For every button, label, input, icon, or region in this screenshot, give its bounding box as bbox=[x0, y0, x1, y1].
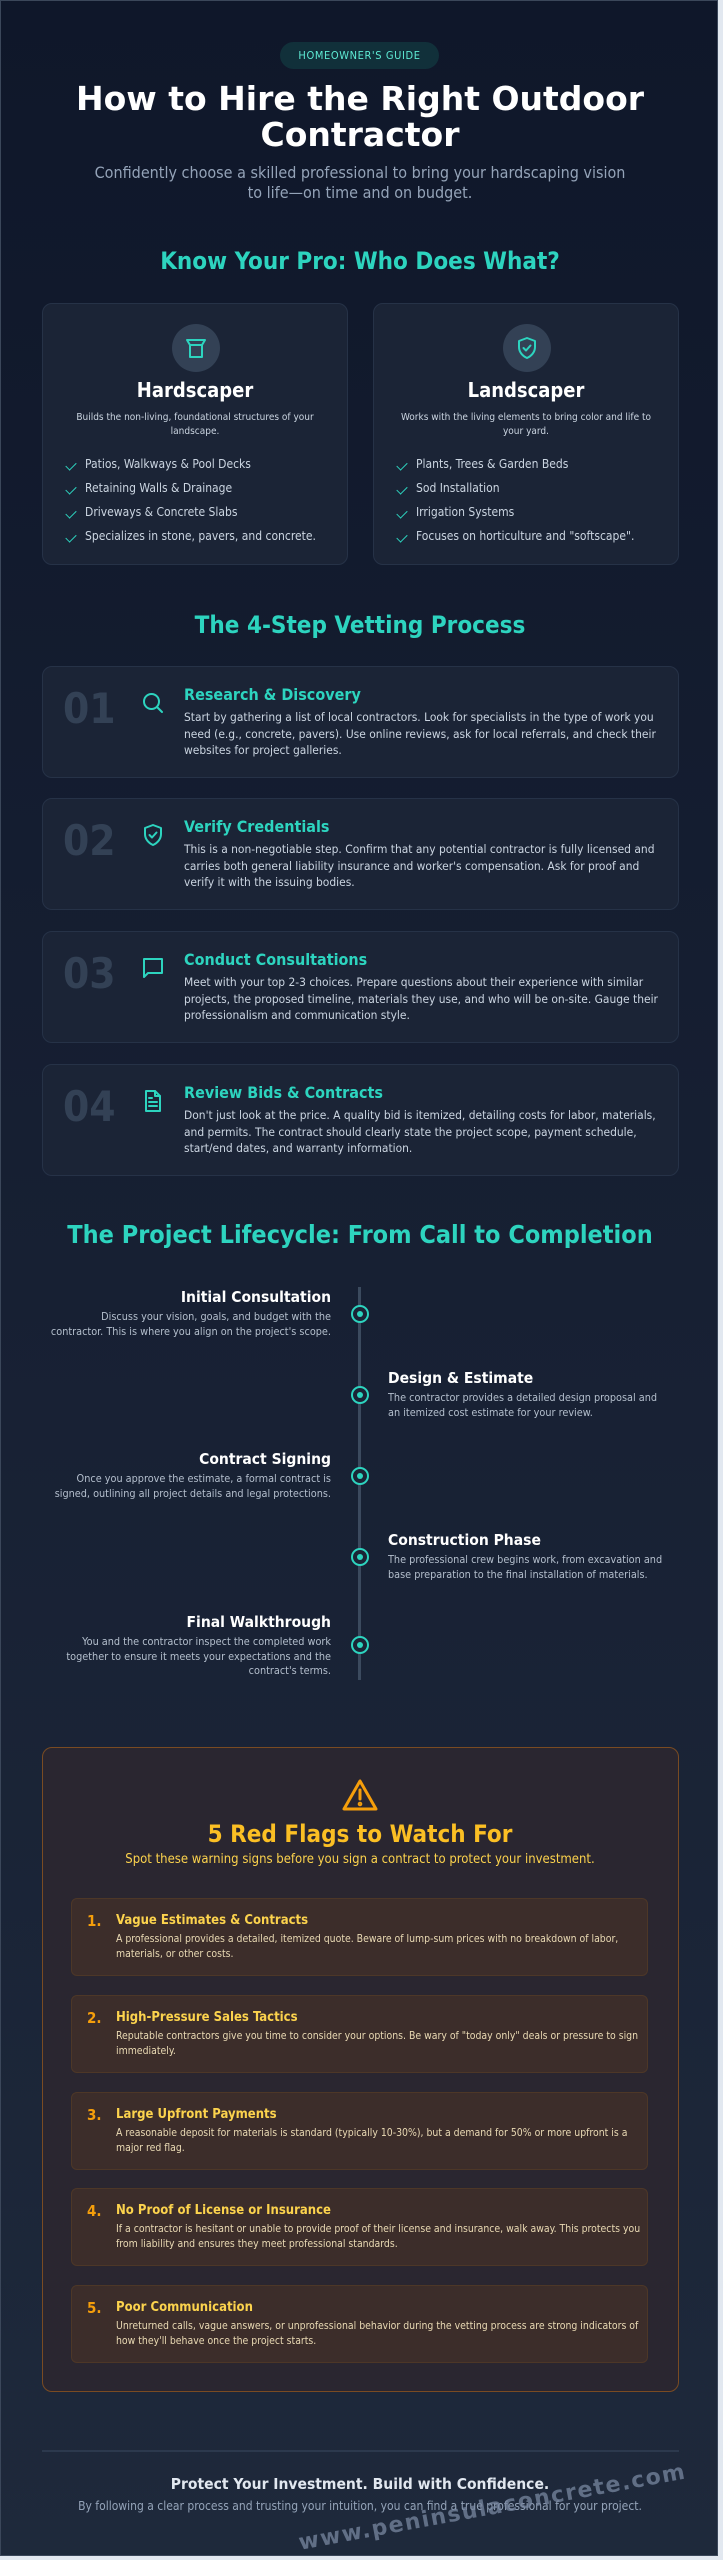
step 4 bbox=[42, 1064, 679, 1176]
flag 1 bbox=[71, 1898, 648, 1976]
footer text: By following a clear process and trusting your intuition, you can find a true professional for your project. bbox=[78, 2499, 642, 2513]
title: How to Hire the Right Outdoor bbox=[76, 79, 644, 118]
timeline item: design & estimate: an itemized cost estimate for your review. bbox=[388, 1406, 593, 1418]
panel: landscaper bbox=[373, 303, 679, 565]
list bbox=[65, 457, 316, 543]
step 1: 01 bbox=[63, 684, 116, 733]
timeline item: construction: base preparation to the final installation of materials. bbox=[388, 1568, 648, 1580]
panel: hardscaper bbox=[42, 303, 348, 565]
step 1: Research & Discovery bbox=[184, 685, 361, 704]
list: Sod Installation bbox=[416, 481, 500, 495]
list: Specializes in stone, pavers, and concrete. bbox=[85, 529, 316, 543]
timeline item: contract signing bbox=[55, 1450, 331, 1500]
step 4: 04 bbox=[63, 1082, 116, 1131]
watermark: www.peninsulaconcrete.com bbox=[297, 2459, 688, 2556]
list: Irrigation Systems bbox=[416, 505, 514, 519]
timeline item: initial consultation bbox=[51, 1288, 331, 1338]
title: Contractor bbox=[260, 115, 459, 154]
timeline item: design & estimate bbox=[388, 1369, 657, 1418]
red flags subtitle: Spot these warning signs before you sign a contract to protect your investment. bbox=[125, 1852, 595, 1867]
heading: vetting process: The 4-Step Vetting Process bbox=[195, 611, 525, 639]
step 3 bbox=[42, 931, 679, 1043]
flag 3: 3. bbox=[87, 2106, 102, 2124]
subtitle bbox=[95, 163, 625, 202]
timeline item: final walkthrough: Final Walkthrough bbox=[187, 1613, 331, 1631]
flag 1: A professional provides a detailed, itemized quote. Beware of lump-sum prices with no breakdown of labor, materials, or other costs. bbox=[116, 1933, 618, 1960]
timeline item: design & estimate: Design & Estimate bbox=[388, 1369, 533, 1387]
icon: chat bbox=[143, 958, 163, 978]
step 4: Review Bids & Contracts bbox=[184, 1083, 383, 1102]
flag 5: 5. bbox=[87, 2299, 102, 2317]
list: Patios, Walkways & Pool Decks bbox=[85, 457, 251, 471]
title bbox=[76, 79, 644, 154]
list bbox=[396, 457, 634, 543]
step 3: Meet with your top 2-3 choices. Prepare questions about their experience with similar projects, the proposed timeline, materials they use, and who will be on-site. Gauge their professionalism and communication style. bbox=[184, 975, 658, 1022]
flag 2: 2. bbox=[87, 2009, 102, 2027]
red flags title: 5 Red Flags to Watch For bbox=[208, 1820, 512, 1848]
list: Plants, Trees & Garden Beds bbox=[416, 457, 568, 471]
timeline item: contract signing: signed, outlining all project details and legal protections. bbox=[55, 1486, 331, 1500]
heading: lifecycle: The Project Lifecycle: From Call to Completion bbox=[67, 1220, 653, 1249]
badge bbox=[280, 42, 439, 69]
panel: red flags bbox=[42, 1747, 679, 2392]
timeline item: initial consultation: contractor. This is where you align on the project's scope. bbox=[51, 1324, 331, 1338]
step 1 bbox=[42, 666, 679, 778]
timeline item: contract signing: Once you approve the estimate, a formal contract is bbox=[77, 1472, 331, 1485]
footer title: Protect Your Investment. Build with Confidence. bbox=[171, 2475, 549, 2493]
timeline item: construction bbox=[388, 1531, 662, 1580]
list: Focuses on horticulture and "softscape". bbox=[416, 529, 634, 543]
step 2: Verify Credentials bbox=[184, 817, 329, 836]
icon: shield check bbox=[144, 824, 162, 846]
timeline item: design & estimate: The contractor provides a detailed design proposal and bbox=[388, 1391, 657, 1404]
card title: Landscaper bbox=[468, 378, 584, 402]
flag 2 bbox=[71, 1995, 648, 2073]
list: Driveways & Concrete Slabs bbox=[85, 505, 238, 519]
flag 2: Reputable contractors give you time to consider your options. Be wary of "today only" deals or pressure to sign immediately. bbox=[116, 2030, 638, 2056]
timeline item: contract signing: Contract Signing bbox=[199, 1450, 331, 1468]
step 1: Start by gathering a list of local contractors. Look for specialists in the type of work you need (e.g., concrete, pavers). Use online reviews, ask for local referrals, and check their websites for project galleries. bbox=[184, 710, 656, 757]
flag 5 bbox=[71, 2285, 648, 2363]
icon: warning bbox=[342, 1779, 378, 1810]
icon: search bbox=[143, 693, 163, 713]
card description: Works with the living elements to bring color and life to your yard. bbox=[401, 412, 651, 437]
flag 1: 1. bbox=[87, 1912, 102, 1930]
icon: hardscape bbox=[172, 324, 220, 372]
icon: shield bbox=[503, 324, 551, 372]
flag 3: Large Upfront Payments bbox=[116, 2107, 277, 2122]
timeline item: initial consultation: Discuss your vision, goals, and budget with the bbox=[101, 1310, 331, 1323]
timeline item: final walkthrough bbox=[66, 1613, 331, 1677]
timeline bbox=[51, 1287, 662, 1680]
step 2: 02 bbox=[63, 816, 116, 865]
flag 4: 4. bbox=[87, 2202, 102, 2220]
badge: HOMEOWNER'S GUIDE bbox=[298, 49, 421, 62]
step 2 bbox=[42, 798, 679, 910]
step 2: This is a non-negotiable step. Confirm that any potential contractor is fully licensed and carries both general liability insurance and worker's compensation. Ask for proof and verify it with the issuing bodies. bbox=[184, 842, 655, 889]
flag 4: No Proof of License or Insurance bbox=[116, 2203, 331, 2218]
subtitle: Confidently choose a skilled professional to bring your hardscaping vision bbox=[95, 163, 625, 182]
flag 1: Vague Estimates & Contracts bbox=[116, 1913, 308, 1928]
step 3: 03 bbox=[63, 949, 116, 998]
icon: document bbox=[145, 1090, 161, 1112]
timeline item: construction: Construction Phase bbox=[388, 1531, 541, 1549]
flag 4: If a contractor is hesitant or unable to provide proof of their license and insurance, walk away. This protects you from liability and ensures they meet professional standards. bbox=[116, 2223, 640, 2250]
step 3: Conduct Consultations bbox=[184, 950, 367, 969]
flag 5: Unreturned calls, vague answers, or unprofessional behavior during the vetting process are strong indicators of how they'll behave once the project starts. bbox=[116, 2320, 638, 2346]
timeline item: final walkthrough: You and the contractor inspect the completed work bbox=[82, 1635, 331, 1648]
step 4: Don't just look at the price. A quality bid is itemized, detailing costs for labor, materials, and permits. The contract should clearly state the project scope, payment schedule, start/end dates, and warranty information. bbox=[184, 1108, 656, 1155]
timeline item: final walkthrough: together to ensure it meets your expectations and the bbox=[66, 1650, 331, 1662]
list: Retaining Walls & Drainage bbox=[85, 481, 232, 495]
card title: Hardscaper bbox=[137, 378, 253, 402]
timeline item: construction: The professional crew begins work, from excavation and bbox=[388, 1553, 662, 1566]
card description: Builds the non-living, foundational structures of your landscape. bbox=[76, 412, 314, 437]
flag 3 bbox=[71, 2092, 648, 2170]
subtitle: to life—on time and on budget. bbox=[248, 183, 472, 202]
timeline item: initial consultation: Initial Consultation bbox=[181, 1288, 331, 1306]
flag 2: High-Pressure Sales Tactics bbox=[116, 2010, 298, 2025]
heading: know your pro: Know Your Pro: Who Does What? bbox=[160, 247, 560, 275]
flag 3: A reasonable deposit for materials is standard (typically 10-30%), but a demand for 50% or more upfront is a major red flag. bbox=[116, 2127, 627, 2154]
flag 5: Poor Communication bbox=[116, 2300, 253, 2315]
timeline item: final walkthrough: contract's terms. bbox=[249, 1664, 331, 1677]
flag 4 bbox=[71, 2188, 648, 2266]
